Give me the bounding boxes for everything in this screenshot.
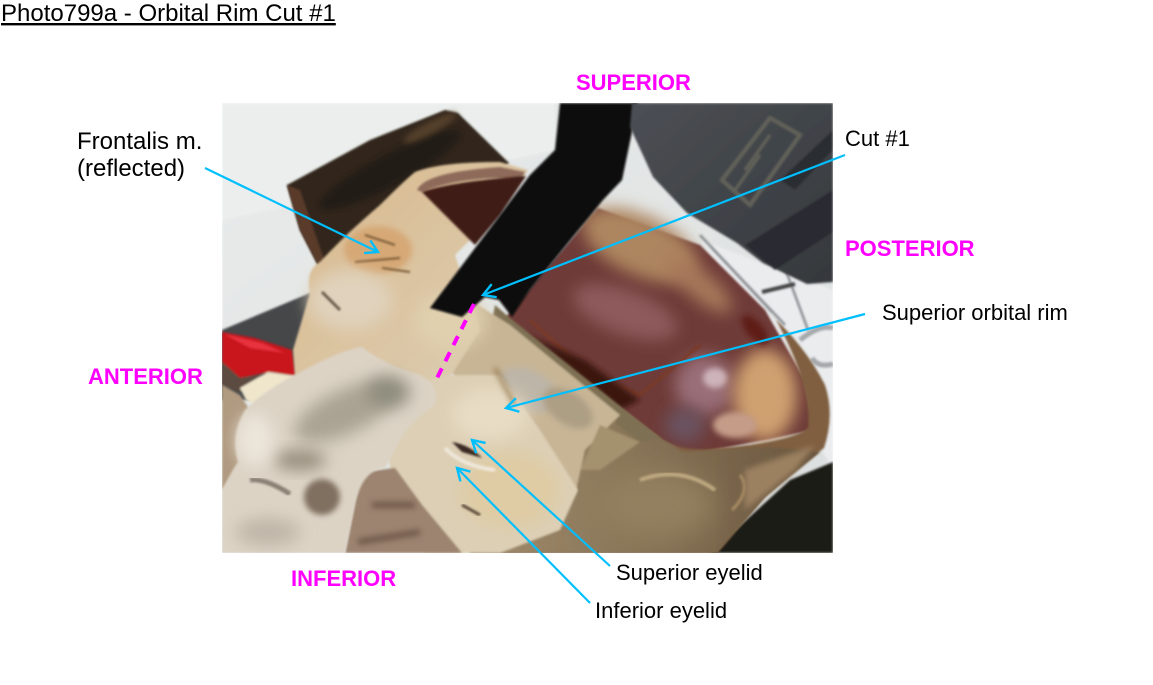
red object and white cylinder (222, 332, 296, 490)
direction: posterior: POSTERIOR (845, 236, 975, 261)
direction: superior: SUPERIOR (576, 70, 691, 95)
title: Photo799a - Orbital Rim Cut #1 (1, 0, 336, 27)
oscillating saw body (630, 103, 833, 284)
label: frontalis: Frontalis m. (77, 128, 202, 155)
photo: dissection specimen (222, 103, 833, 553)
scissors on tray (700, 235, 833, 365)
eye region (375, 368, 578, 553)
skull rim and right skin (470, 307, 830, 553)
wooden head block (287, 109, 509, 270)
dark tray (222, 293, 833, 553)
direction: inferior: INFERIOR (291, 566, 396, 591)
label: inferior eyelid: Inferior eyelid (595, 598, 727, 623)
label: superior eyelid: Superior eyelid (616, 560, 763, 585)
forehead scalp (293, 162, 528, 400)
leader arrow: cut #1 (483, 155, 845, 295)
cranial interior (505, 192, 815, 455)
label: superior orbital rim: Superior orbital rim (882, 300, 1068, 325)
cheek muscle (345, 468, 462, 553)
saw blade (430, 103, 638, 317)
table background (222, 103, 833, 553)
direction: anterior: ANTERIOR (88, 364, 203, 389)
leader arrow: superior eyelid (472, 440, 610, 566)
leader arrow: frontalis (205, 168, 378, 252)
label: frontalis: (reflected) (77, 155, 185, 182)
lower temporal skin (500, 421, 821, 553)
skull bone edge (450, 300, 660, 495)
leader arrow: inferior eyelid (457, 468, 590, 603)
cut line: magenta dashes (434, 304, 474, 384)
label: cut #1: Cut #1 (845, 126, 910, 151)
nose and upper lip (222, 347, 436, 553)
leader arrow: superior orbital rim (506, 314, 865, 408)
